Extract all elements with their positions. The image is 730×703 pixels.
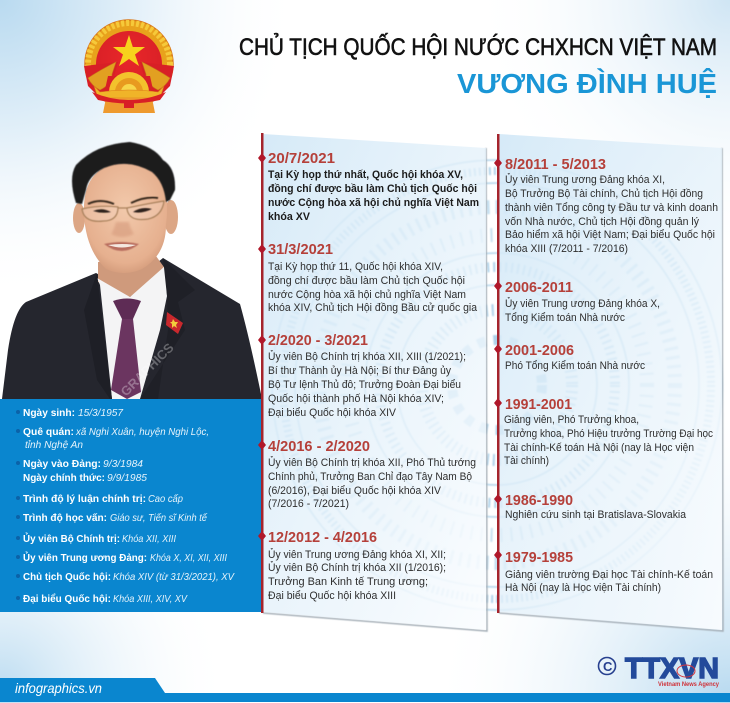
emblem — [84, 20, 174, 113]
markers — [258, 153, 266, 541]
entry 1979-1985: Giảng viên trường Đại học Tài chính-Kế toán — [505, 569, 713, 581]
entry 8/2011 - 5/2013: 8/2011 - 5/2013 — [505, 157, 606, 173]
birth date: Ngày sinh: — [23, 407, 75, 419]
entry 8/2011 - 5/2013: vốn Nhà nước, Chủ tịch Hội đồng quản lý — [505, 216, 700, 228]
entry 1979-1985 — [505, 550, 713, 594]
entry 4/2016 - 2/2020: Ủy viên Bộ Chính trị khóa XII, Phó Thủ tướng — [268, 456, 476, 469]
na deputy — [23, 593, 188, 605]
bullet dots — [16, 410, 20, 600]
entry 2/2020 - 3/2021: Đại biểu Quốc hội khóa XIV — [268, 407, 397, 419]
portrait — [2, 142, 262, 399]
entry 12/2012 - 4/2016: Ủy viên Trung ương Đảng khóa XI, XII; — [268, 548, 446, 561]
entry 2001-2006 — [505, 343, 646, 372]
bronze drum pattern — [272, 160, 722, 610]
na chairman: Khóa XIV (từ 31/3/2021), XV — [113, 571, 235, 583]
politburo: Khóa XII, XIII — [122, 533, 176, 545]
home town — [23, 426, 209, 451]
entry 31/3/2021: khóa XIV, Chủ tịch Hội đồng Bầu cử quốc gia — [268, 302, 477, 314]
website: infographics.vn — [15, 680, 102, 696]
entry 31/3/2021: Tại Kỳ họp thứ 11, Quốc hội khóa XIV, — [268, 261, 443, 273]
entry 8/2011 - 5/2013: khóa XIII (7/2011 - 7/2016) — [505, 243, 628, 255]
entry 8/2011 - 5/2013: Bảo hiểm xã hội Việt Nam; Đại biểu Quốc hội — [505, 229, 715, 241]
entry 1991-2001: Tài chính) — [504, 455, 549, 467]
entry 1991-2001: Trưởng khoa, Phó Hiệu trưởng Trường Đại học — [504, 428, 714, 440]
political theory: Cao cấp — [148, 493, 183, 505]
entry 2/2020 - 3/2021: Bí thư Thành ủy Hà Nội; Bí thư Đảng ủy — [268, 365, 452, 377]
entry 2/2020 - 3/2021 — [268, 333, 466, 419]
party dates: 9/3/1984 — [103, 458, 143, 470]
blue profile panel — [0, 399, 262, 612]
na chairman — [23, 571, 235, 583]
entry 2/2020 - 3/2021: Ủy viên Bộ Chính trị khóa XII, XIII (1/2021); — [268, 350, 466, 363]
birth date: 15/3/1957 — [78, 407, 124, 419]
entry 20/7/2021 — [268, 151, 479, 223]
entry 12/2012 - 4/2016: Ủy viên Bộ Chính trị khóa XII (1/2016); — [268, 561, 446, 574]
education — [23, 512, 208, 524]
name: VƯƠNG ĐÌNH HUỆ — [457, 68, 717, 99]
panel: right timeline — [494, 134, 723, 631]
entry 2006-2011: 2006-2011 — [505, 280, 573, 296]
education: Trình độ học vấn: — [23, 512, 107, 524]
education: Giáo sư, Tiến sĩ Kinh tế — [110, 512, 208, 524]
entry 4/2016 - 2/2020 — [268, 439, 476, 510]
entry 20/7/2021: đồng chí được bầu làm Chủ tịch Quốc hội — [268, 183, 477, 195]
birth date — [23, 407, 124, 419]
entry 8/2011 - 5/2013 — [505, 157, 718, 255]
glasses — [82, 201, 164, 221]
watermark: GRAPHICS — [118, 340, 177, 399]
entry 1979-1985: Hà Nội (nay là Học viện Tài chính) — [505, 582, 661, 594]
entry 2006-2011: Tổng Kiểm toán Nhà nước — [505, 312, 626, 324]
entry 31/3/2021: 31/3/2021 — [268, 242, 333, 258]
entry 1986-1990: Nghiên cứu sinh tại Bratislava-Slovakia — [505, 509, 686, 521]
party dates — [23, 458, 147, 484]
entry 12/2012 - 4/2016: Trưởng Ban Kinh tế Trung ương; — [268, 576, 428, 588]
entry 2/2020 - 3/2021: 2/2020 - 3/2021 — [268, 333, 368, 349]
na deputy: Khóa XIII, XIV, XV — [113, 593, 188, 605]
entry 20/7/2021: Tại Kỳ họp thứ nhất, Quốc hội khóa XV, — [268, 169, 463, 181]
markers — [494, 158, 502, 560]
entry 4/2016 - 2/2020: 4/2016 - 2/2020 — [268, 439, 370, 455]
home town: Quê quán: — [23, 426, 74, 438]
politburo: Ủy viên Bộ Chính trị: — [23, 532, 120, 545]
politburo — [23, 532, 176, 545]
entry 1991-2001: Giảng viên, Phó Trưởng khoa, — [504, 414, 639, 426]
entry 20/7/2021: 20/7/2021 — [268, 151, 335, 167]
entry 2006-2011: Ủy viên Trung ương Đảng khóa X, — [505, 297, 660, 310]
panel: left timeline — [258, 133, 487, 631]
central committee: Khóa X, XI, XII, XIII — [150, 552, 227, 564]
entry 1991-2001 — [504, 397, 714, 467]
na chairman: Chủ tịch Quốc hội: — [23, 571, 111, 583]
party dates: Ngày vào Đảng: — [23, 458, 101, 470]
entry 2001-2006: 2001-2006 — [505, 343, 574, 359]
entry 8/2011 - 5/2013: thành viên Tổng công ty Đầu tư và kinh doanh — [505, 202, 718, 214]
entry 1991-2001: Tài chính-Kế toán Hà Nội (nay là Học viện — [504, 442, 694, 454]
entry 4/2016 - 2/2020: Chính phủ, Trưởng Ban Chỉ đạo Tây Nam Bộ — [268, 471, 472, 483]
central committee: Ủy viên Trung ương Đảng: — [23, 551, 147, 564]
political theory: Trình độ lý luận chính trị: — [23, 493, 146, 505]
entry 12/2012 - 4/2016 — [268, 530, 446, 602]
na deputy: Đại biểu Quốc hội: — [23, 593, 111, 605]
entry 20/7/2021: nước Cộng hòa xã hội chủ nghĩa Việt Nam — [268, 197, 479, 209]
entry 4/2016 - 2/2020: (6/2016), Đại biểu Quốc hội khóa XIV — [268, 485, 442, 497]
icon: copyright: C — [603, 659, 613, 674]
entry 20/7/2021: khóa XV — [268, 211, 311, 223]
entry 1979-1985: 1979-1985 — [505, 550, 573, 566]
logo: TTXVN: Vietnam News Agency — [658, 681, 719, 688]
entry 2006-2011 — [505, 280, 660, 324]
entry 31/3/2021 — [268, 242, 477, 314]
entry 31/3/2021: đồng chí được bầu làm Chủ tịch Quốc hội — [268, 275, 465, 287]
entry 2001-2006: Phó Tổng Kiểm toán Nhà nước — [505, 360, 646, 372]
entry 1986-1990: 1986-1990 — [505, 493, 573, 509]
entry 2/2020 - 3/2021: Bộ Tư lệnh Thủ đô; Trưởng Đoàn Đại biểu — [268, 379, 461, 391]
logo: TTXVN: TTXVN — [625, 653, 719, 685]
entry 12/2012 - 4/2016: Đại biểu Quốc hội khóa XIII — [268, 590, 396, 602]
entry 2/2020 - 3/2021: Quốc hội thành phố Hà Nội khóa XIV; — [268, 393, 444, 405]
home town: xã Nghi Xuân, huyện Nghi Lộc, — [75, 426, 209, 438]
entry 4/2016 - 2/2020: (7/2016 - 7/2021) — [268, 498, 349, 510]
footer band — [0, 678, 730, 702]
icon: copyright — [598, 658, 616, 674]
entry 31/3/2021: nước Cộng hòa xã hội chủ nghĩa Việt Nam — [268, 289, 466, 301]
central committee — [23, 551, 227, 564]
entry 8/2011 - 5/2013: Ủy viên Trung ương Đảng khóa XI, — [505, 173, 665, 186]
party dates: Ngày chính thức: — [23, 472, 105, 484]
entry 12/2012 - 4/2016: 12/2012 - 4/2016 — [268, 530, 377, 546]
entry 1986-1990 — [505, 493, 686, 521]
entry 1991-2001: 1991-2001 — [505, 397, 572, 413]
party dates: 9/9/1985 — [107, 472, 147, 484]
title — [239, 32, 717, 99]
home town: tỉnh Nghệ An — [25, 439, 83, 451]
entry 8/2011 - 5/2013: Bộ Trưởng Bộ Tài chính, Chủ tịch Hội đồng — [505, 188, 703, 200]
